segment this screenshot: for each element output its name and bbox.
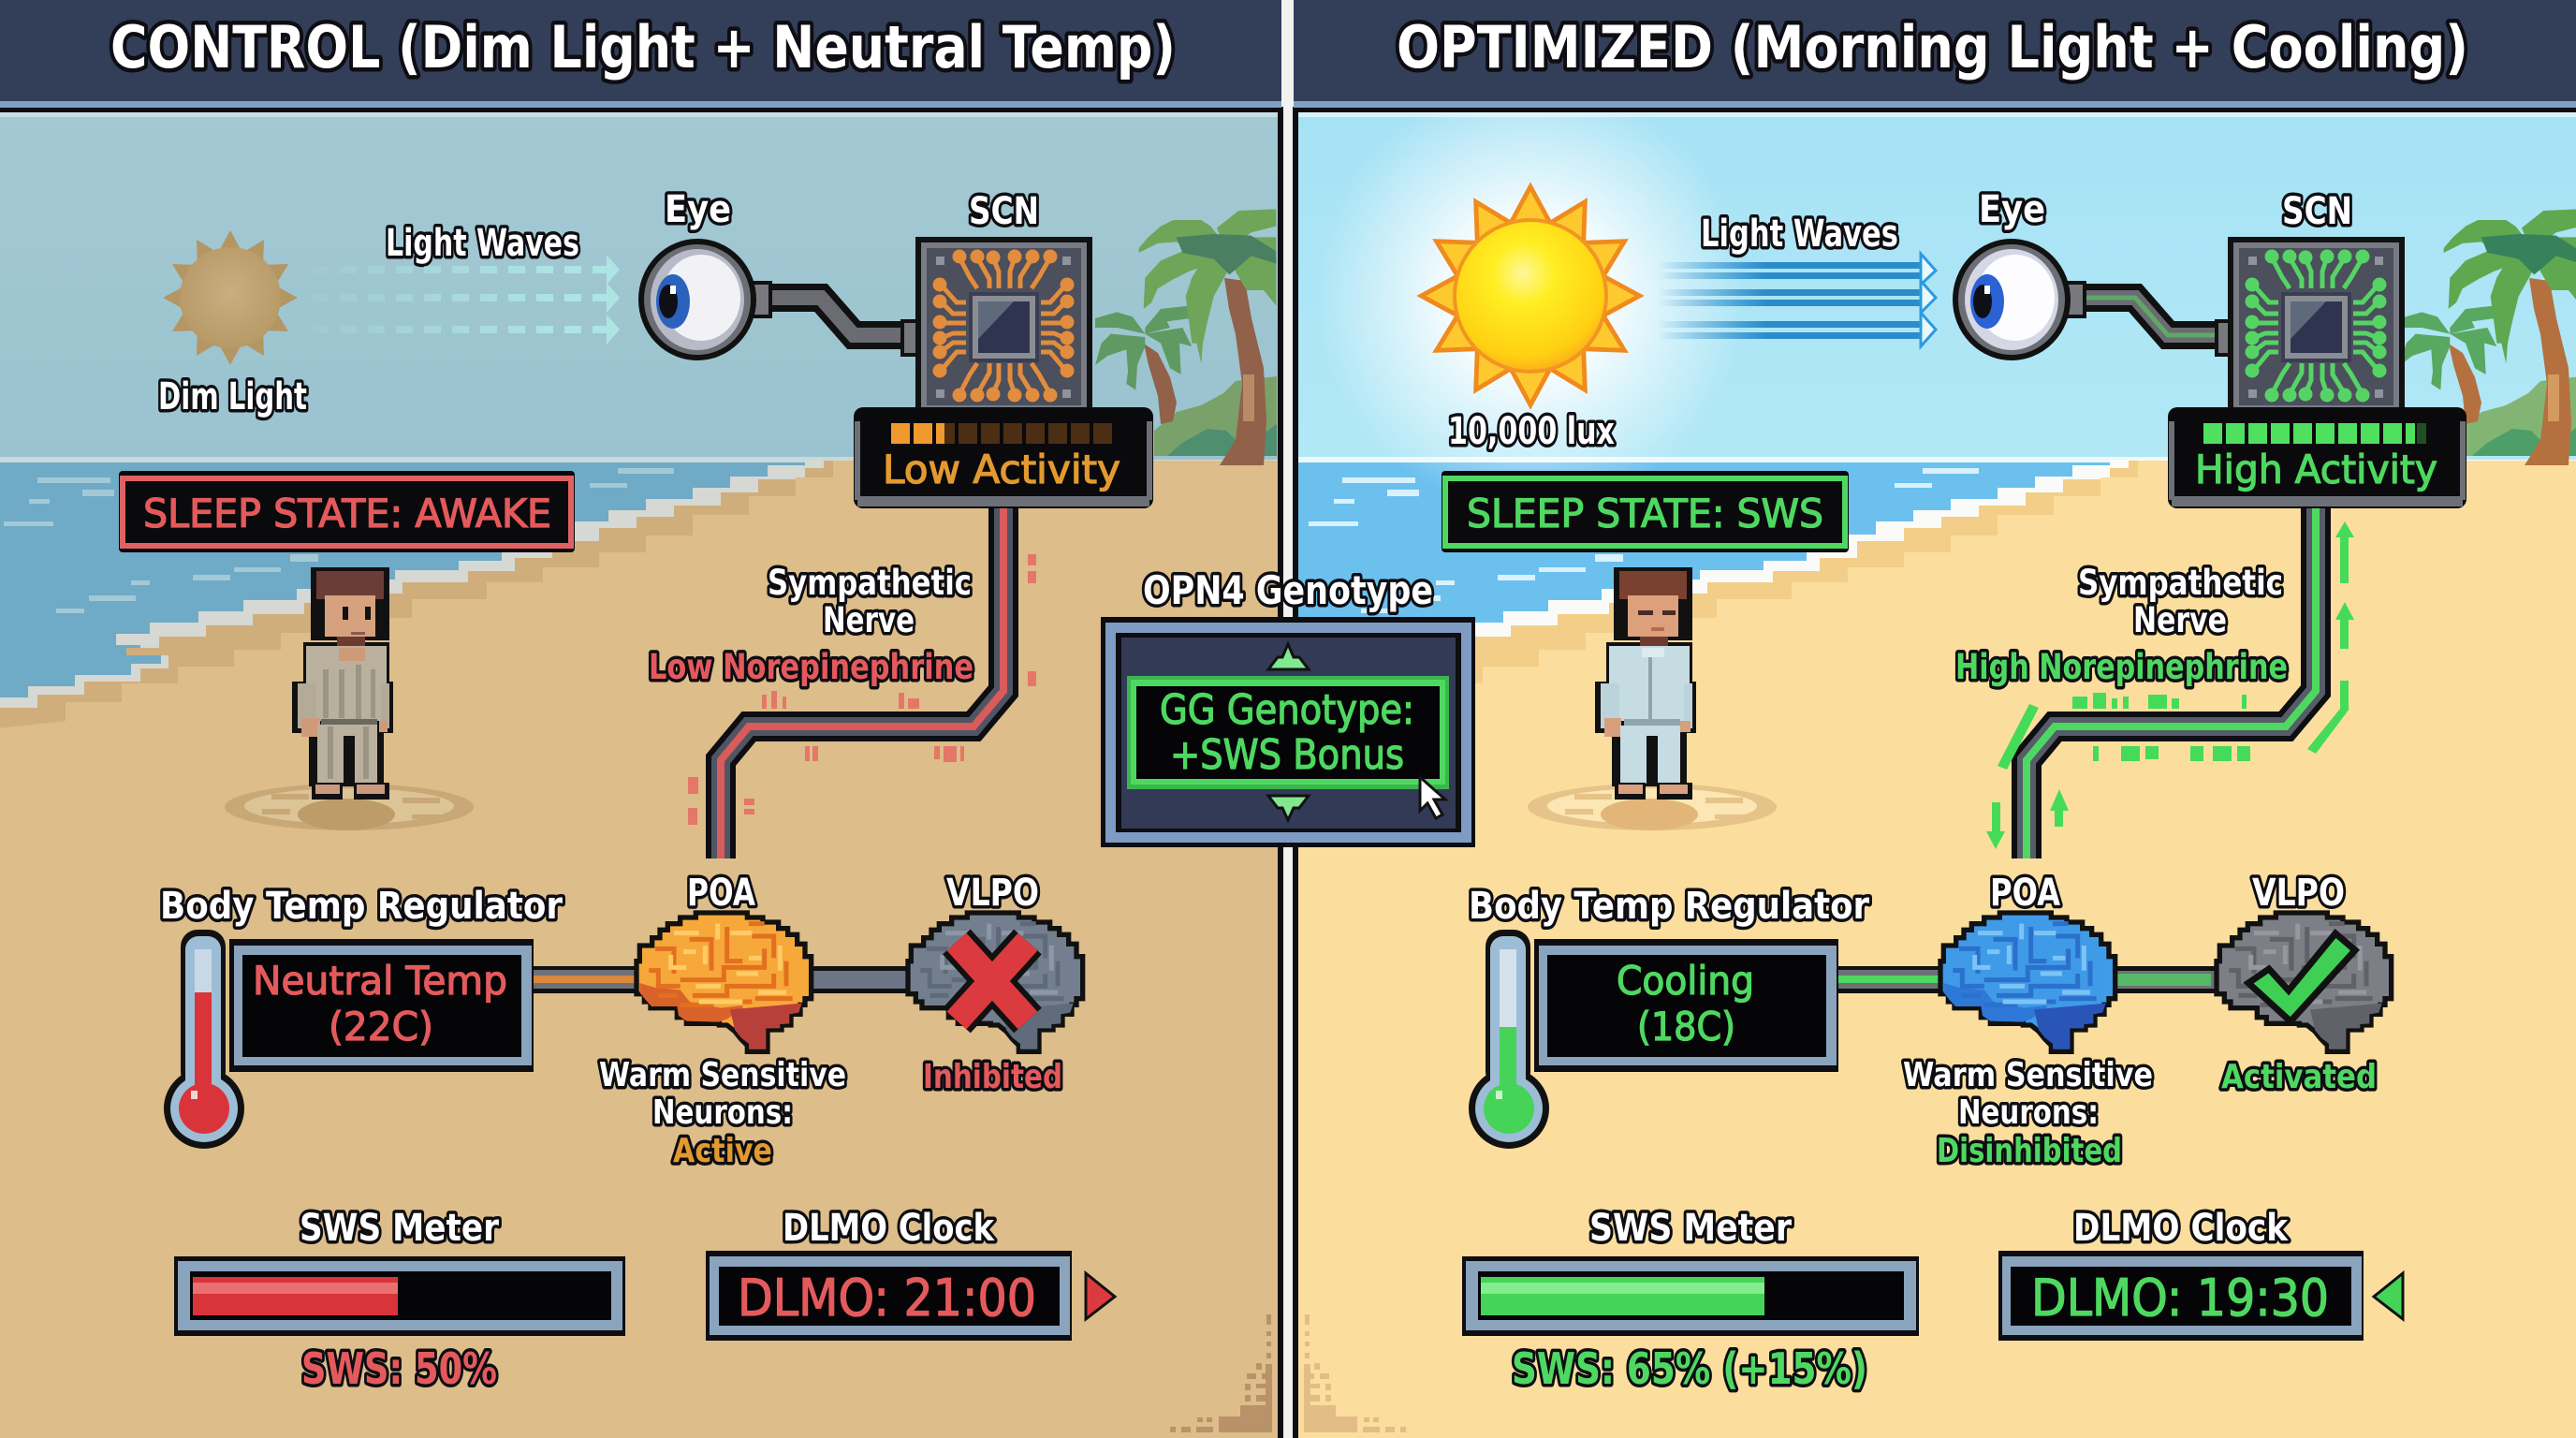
temperature display	[229, 939, 534, 1072]
DLMO clock display: DLMO: 21:00	[738, 1269, 1036, 1328]
arrows: dim light waves	[368, 255, 620, 345]
icon: active VLPO brain	[2217, 913, 2392, 1051]
label: high norepinephrine: High Norepinephrine	[1955, 647, 2288, 687]
sympathetic nerve	[2027, 508, 2316, 858]
label: inhibited: Inhibited	[923, 1058, 1062, 1096]
label: warm sensitive neurons: Neurons:	[1958, 1093, 2099, 1132]
genotype value box	[1127, 676, 1449, 789]
icon: SCN chip	[915, 237, 1092, 411]
DLMO clock display: DLMO: 19:30	[2031, 1269, 2329, 1328]
sleep state badge	[119, 471, 575, 552]
arrow: DLMO delay	[1086, 1273, 1115, 1319]
SCN activity display	[854, 407, 1153, 508]
label: OPN4 genotype: OPN4 Genotype	[1143, 567, 1433, 613]
icon: inhibited VLPO brain	[908, 913, 1083, 1051]
label: light waves: Light Waves	[1701, 213, 1898, 256]
label: SWS meter: SWS Meter	[1589, 1207, 1792, 1250]
SCN activity display: Low Activity	[883, 447, 1120, 492]
label: body temp regulator: Body Temp Regulator	[160, 885, 563, 928]
header: control: CONTROL (Dim Light + Neutral Temp)	[110, 13, 1176, 81]
temperature display: (18C)	[1637, 1004, 1735, 1049]
genotype value box: GG Genotype:	[1160, 686, 1414, 734]
label: SCN: SCN	[2282, 190, 2352, 233]
icon: warm POA brain	[637, 913, 812, 1051]
arrow: DLMO advance	[2374, 1273, 2403, 1319]
label: VLPO: VLPO	[946, 872, 1039, 915]
header: optimized	[1294, 0, 2576, 112]
DLMO clock display	[1998, 1251, 2364, 1341]
sleep state badge: SLEEP STATE: SWS	[1467, 491, 1823, 536]
temperature display: Cooling	[1617, 958, 1754, 1004]
label: warm sensitive neurons: Neurons:	[652, 1093, 793, 1132]
icon: eye	[1955, 242, 2232, 358]
label: warm sensitive neurons: Disinhibited	[1937, 1132, 2122, 1170]
label: DLMO clock: DLMO Clock	[783, 1207, 995, 1250]
connectors	[529, 966, 913, 993]
label: POA: POA	[687, 872, 755, 915]
genotype value box: +SWS Bonus	[1170, 731, 1404, 779]
palm trees	[2400, 209, 2576, 465]
arrows: bright light beams	[1658, 254, 1936, 346]
label: dim light: Dim Light	[158, 375, 307, 418]
label: warm sensitive neurons	[1903, 1056, 2153, 1170]
label: sympathetic nerve	[2078, 563, 2283, 640]
arrow: up	[1268, 644, 1309, 669]
icon: cool POA brain	[1940, 913, 2115, 1051]
label: SWS meter: SWS Meter	[300, 1207, 499, 1250]
icon: eye	[641, 242, 917, 358]
selector frame	[1101, 617, 1475, 847]
label: eye: Eye	[665, 188, 731, 231]
center divider	[1278, 0, 1298, 1438]
label: VLPO: VLPO	[2252, 872, 2345, 915]
temperature display: (22C)	[329, 1004, 433, 1049]
arrows: high norepinephrine flow	[1986, 521, 2354, 849]
sand corner	[1304, 1314, 1406, 1432]
sand corner	[1170, 1314, 1272, 1432]
character: asleep	[1528, 567, 1777, 830]
label: DLMO clock: DLMO Clock	[2073, 1207, 2289, 1250]
connectors	[1835, 966, 2218, 993]
label: body temp regulator: Body Temp Regulator	[1469, 885, 1869, 928]
label: sympathetic nerve: Sympathetic	[768, 563, 972, 603]
label: warm sensitive neurons: Active	[673, 1132, 772, 1170]
icon: green check	[2248, 933, 2355, 1021]
label: sympathetic nerve: Nerve	[2133, 600, 2227, 640]
panel: OPN4 genotype selector	[1101, 567, 1475, 847]
label: eye: Eye	[1979, 188, 2045, 231]
temperature display	[1534, 939, 1838, 1072]
thermometer	[1469, 930, 1549, 1149]
icon: red X	[957, 942, 1028, 1020]
SWS meter bar	[1462, 1256, 1919, 1336]
label: warm sensitive neurons	[599, 1056, 846, 1170]
icon: bright sun	[1315, 81, 1746, 511]
panel: optimized	[1286, 81, 2576, 1438]
SWS value: SWS: 50%	[301, 1343, 497, 1394]
label: sympathetic nerve: Sympathetic	[2078, 563, 2283, 603]
label: activated: Activated	[2221, 1058, 2377, 1096]
label: warm sensitive neurons: Warm Sensitive	[599, 1056, 846, 1094]
label: sympathetic nerve	[768, 563, 972, 640]
icon: dim sun	[163, 230, 298, 365]
header: control	[0, 0, 1281, 112]
label: SCN: SCN	[969, 190, 1039, 233]
label: POA: POA	[1990, 872, 2060, 915]
SWS meter bar	[174, 1256, 625, 1336]
SCN activity display: High Activity	[2195, 447, 2437, 492]
label: warm sensitive neurons: Warm Sensitive	[1903, 1056, 2153, 1094]
SCN activity display	[2168, 407, 2466, 508]
sleep state badge: SLEEP STATE: AWAKE	[143, 491, 551, 536]
label: light waves: Light Waves	[386, 222, 579, 265]
label: 10,000 lux: 10,000 lux	[1448, 410, 1615, 453]
arrow: down	[1268, 796, 1309, 820]
temperature display: Neutral Temp	[253, 958, 507, 1004]
sympathetic nerve	[721, 508, 1003, 858]
SWS value: SWS: 65% (+15%)	[1512, 1343, 1867, 1394]
panel: control	[0, 112, 1320, 1438]
DLMO clock display	[706, 1251, 1072, 1341]
label: low norepinephrine: Low Norepinephrine	[649, 647, 973, 687]
particles: low norepinephrine	[688, 554, 1036, 825]
sleep state badge	[1442, 471, 1849, 552]
icon: mouse cursor	[1420, 777, 1445, 818]
icon: SCN chip	[2228, 237, 2405, 411]
label: sympathetic nerve: Nerve	[823, 600, 915, 640]
palm trees	[1095, 209, 1277, 465]
character: awake	[225, 567, 474, 830]
thermometer	[164, 930, 244, 1149]
